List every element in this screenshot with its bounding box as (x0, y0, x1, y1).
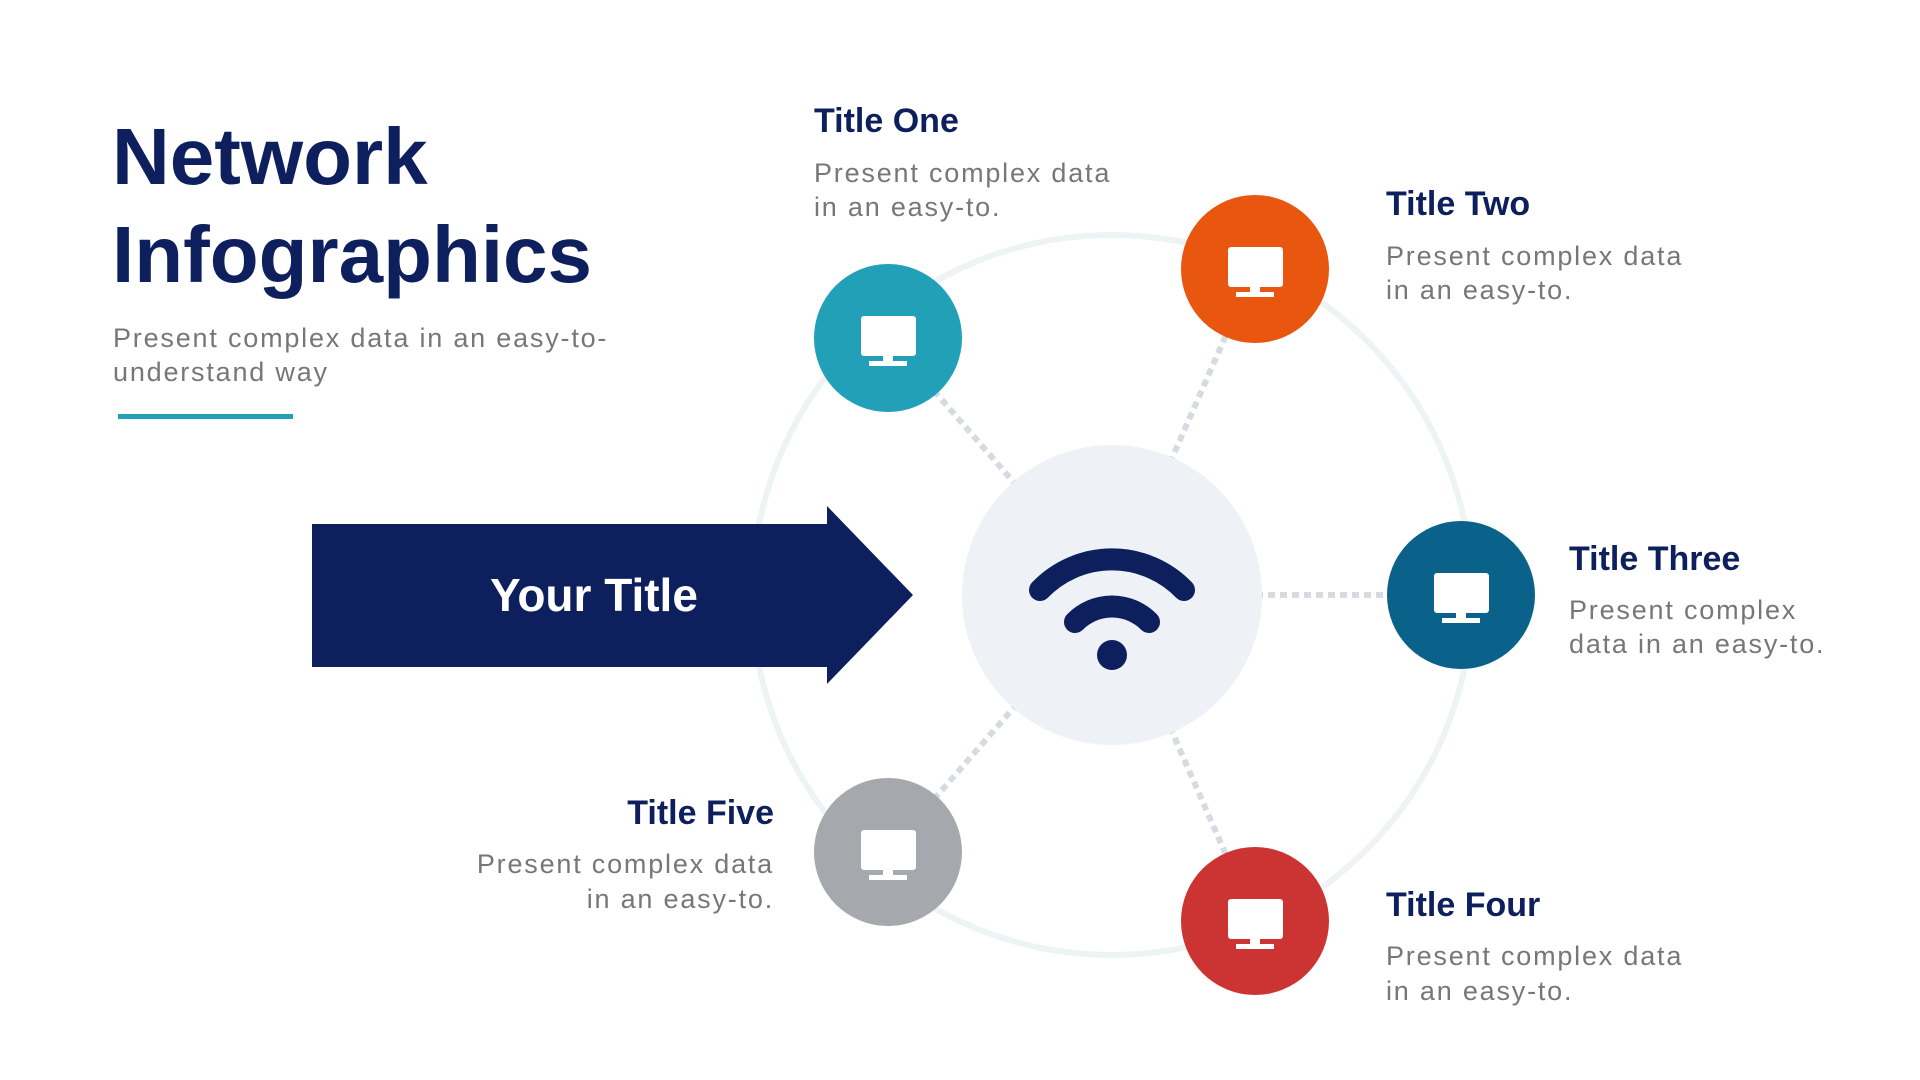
label: Title Two: Title Two (1386, 185, 1530, 223)
outer ring (752, 235, 1472, 955)
label: Title Four: in an easy-to. (1386, 976, 1573, 1006)
arrow: Your Title (312, 506, 913, 684)
label: Title Two: Present complex data (1386, 241, 1683, 271)
label: Title One: Title One (814, 102, 959, 140)
label: Title Three: Present complex (1569, 595, 1797, 625)
title: Infographics (112, 210, 592, 299)
label: Title Two (1386, 185, 1683, 305)
node 3 (1387, 521, 1535, 669)
node 4 (1181, 847, 1329, 995)
label: Title One (814, 102, 1111, 222)
label: Title Three (1569, 540, 1825, 659)
node 2 (1181, 195, 1329, 343)
arrow: Your Title: Your Title (490, 569, 698, 621)
title (112, 112, 592, 299)
subtitle: understand way (113, 357, 329, 387)
node 5 (814, 778, 962, 926)
center hub with wifi icon (962, 445, 1262, 745)
label: Title One: Present complex data (814, 158, 1111, 188)
label: Title Five (477, 794, 774, 914)
label: Title Two: in an easy-to. (1386, 275, 1573, 305)
label: Title Five: Title Five (627, 794, 774, 832)
subtitle: Present complex data in an easy-to- (113, 323, 608, 353)
title: Network (112, 112, 428, 201)
node 1 (814, 264, 962, 412)
label: Title Three: Title Three (1569, 540, 1740, 578)
label: Title One: in an easy-to. (814, 192, 1001, 222)
label: Title Five: in an easy-to. (587, 884, 774, 914)
dotted connectors (888, 269, 1461, 921)
label: Title Four: Title Four (1386, 886, 1540, 924)
label: Title Four (1386, 886, 1683, 1006)
subtitle (113, 323, 608, 387)
label: Title Five: Present complex data (477, 849, 774, 879)
label: Title Four: Present complex data (1386, 941, 1683, 971)
label: Title Three: data in an easy-to. (1569, 629, 1825, 659)
